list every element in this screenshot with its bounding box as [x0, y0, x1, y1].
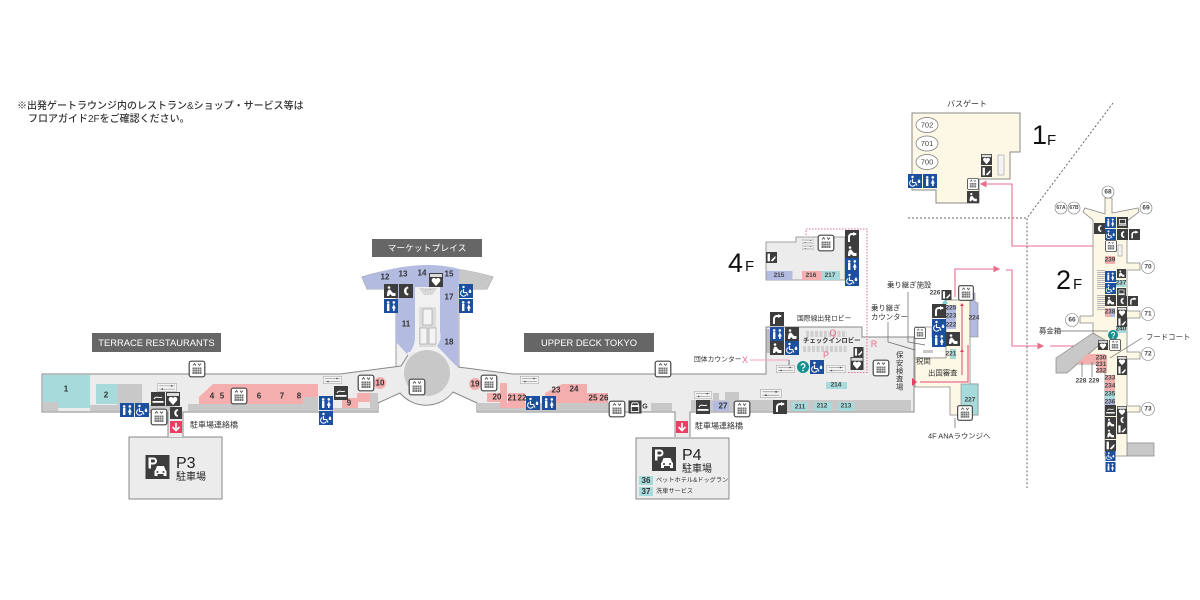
- panel: 2F concourse: 229: [1089, 378, 1100, 384]
- heading: market place: [372, 239, 482, 257]
- note: floor guide reference: フロアガイド2Fをご確認ください。: [28, 112, 190, 125]
- gate 700: 700: [921, 158, 933, 166]
- heading: terrace restaurants: TERRACE RESTAURANTS: [98, 337, 215, 348]
- panel: 4F: 215: [774, 272, 785, 279]
- panel: immigration area: 検: [896, 366, 904, 376]
- floor label: 4F: F: [745, 258, 754, 275]
- numbers: west and market shops: 12: [381, 272, 390, 282]
- panel: immigration area: 乗り継ぎ: [871, 304, 901, 312]
- floor label: 2F: 2: [1056, 265, 1071, 295]
- label: food court: フードコート: [1146, 332, 1190, 342]
- numbers: east shops: 25: [589, 394, 598, 402]
- panel: immigration area: 4F ANAラウンジへ: [928, 432, 991, 440]
- floor label: 1F: [1032, 120, 1056, 150]
- numbers: east shops: 21: [508, 394, 517, 402]
- panel: P3 parking: [129, 437, 222, 499]
- panel: 2F concourse: 230: [1096, 354, 1107, 362]
- panel: 2F concourse: 231: [1096, 361, 1107, 368]
- numbers: east shops: 214: [831, 382, 842, 388]
- floor label: 1F: 1: [1032, 120, 1047, 150]
- numbers: west and market shops: 17: [445, 292, 454, 302]
- numbers: east shops: 24: [570, 384, 579, 394]
- numbers: west and market shops: 2: [104, 390, 109, 400]
- panel: immigration area: 225: [946, 304, 957, 312]
- floor label: 4F: [728, 248, 754, 278]
- numbers: west and market shops: 11: [402, 320, 411, 328]
- P4 label: P4: [682, 447, 702, 464]
- floor label: 2F: [1056, 265, 1082, 295]
- panel: immigration area: 出国審査: [928, 368, 958, 378]
- panel: 2F concourse: 233: [1105, 374, 1116, 382]
- service 36: 36: [642, 476, 651, 485]
- note: floor guide reference: ※出発ゲートラウンジ内のレストラン&ショップ・サービス等は: [17, 99, 304, 112]
- 2F gates: 73: [1144, 406, 1152, 412]
- label: west parking bridge: 駐車場連絡橋: [190, 420, 238, 430]
- numbers: east shops: 213: [841, 402, 852, 410]
- icons: market place: [384, 273, 473, 395]
- panel: 2F concourse: [1056, 198, 1154, 472]
- label: bus gate: バスゲート: [947, 98, 987, 108]
- heading: market place: マーケットプレイス: [388, 243, 466, 253]
- panel: 2F concourse: 240: [1116, 326, 1127, 332]
- numbers: east shops: 23: [552, 386, 561, 394]
- numbers: east shops: 26: [600, 394, 609, 402]
- P3 label: P3: [176, 455, 196, 472]
- numbers: west and market shops: 18: [445, 338, 454, 346]
- panel: immigration area: 221: [946, 350, 957, 358]
- panel: immigration area: 223: [946, 312, 957, 320]
- numbers: west and market shops: 5: [220, 392, 225, 400]
- label: international departure lobby: 国際線出発ロビー: [797, 314, 852, 322]
- numbers: east shops: 212: [817, 402, 828, 410]
- panel: immigration area: 222: [946, 322, 957, 328]
- panel: main terminal floor: [42, 288, 914, 437]
- icons: check-in lobby: [770, 312, 889, 376]
- numbers: east shops: 211: [795, 404, 806, 410]
- icons: upper deck: [481, 361, 787, 433]
- panel: 4F: 216: [806, 272, 817, 279]
- numbers: east shops: 19: [471, 380, 480, 388]
- numbers: west and market shops: 10: [376, 378, 385, 388]
- panel: immigration area: カウンター: [871, 312, 908, 322]
- numbers: west and market shops: 7: [280, 392, 285, 400]
- 2F gates: [1055, 186, 1154, 416]
- numbers: west and market shops: 1: [64, 384, 69, 394]
- panel: 2F concourse: 232: [1096, 368, 1107, 374]
- label P: P: [823, 350, 829, 360]
- P3 parking label: 駐車場: [176, 470, 206, 483]
- icon: P3 parking: [146, 455, 170, 479]
- floor divider lines: [908, 103, 1113, 488]
- panel: immigration area: 場: [896, 382, 904, 392]
- numbers: west and market shops: 14: [418, 268, 427, 278]
- icons: west wing: [120, 361, 374, 433]
- panel: 2F concourse: 239: [1105, 256, 1116, 264]
- floor label: 4F: 4: [728, 248, 743, 278]
- panel: immigration area: 安: [896, 358, 903, 368]
- numbers: west and market shops: 6: [257, 392, 262, 400]
- floor label: 1F: F: [1047, 132, 1056, 149]
- panel: P4 parking: [636, 438, 729, 499]
- 2F gates: 70: [1144, 264, 1152, 270]
- escalators: [157, 288, 845, 399]
- numbers: west and market shops: 15: [445, 270, 454, 278]
- 2F gates: 72: [1144, 350, 1152, 358]
- numbers: east shops: 22: [518, 394, 527, 402]
- 2F gates: 68: [1104, 188, 1112, 196]
- service 36: [639, 476, 728, 485]
- floor label: 2F: F: [1073, 276, 1082, 293]
- label: group counter: 団体カウンター: [694, 354, 742, 364]
- label: check-in lobby: チェックインロビー: [803, 336, 861, 344]
- 2F gates: 67A: [1056, 205, 1066, 211]
- panel: 2F concourse: 238: [1105, 308, 1116, 316]
- panel: immigration area: 224: [969, 314, 980, 322]
- panel: immigration area: 乗り継ぎ施設: [887, 280, 932, 290]
- service 36: ペットホテル&ドッグラン: [656, 476, 728, 484]
- panel: 2F concourse: 237: [1116, 280, 1127, 286]
- numbers: east shops: [471, 380, 852, 410]
- icon: P4 parking: [652, 447, 676, 471]
- 2F gates: 67B: [1069, 205, 1079, 211]
- P4 parking label: 駐車場: [682, 462, 712, 475]
- arrow: routes between floors: [955, 182, 1105, 348]
- panel: immigration area: 保: [896, 350, 904, 360]
- service 37: 37: [642, 487, 651, 496]
- service 37: [639, 487, 693, 496]
- gate 701: 701: [921, 139, 933, 148]
- panel: immigration area: [871, 280, 991, 440]
- numbers: west and market shops: 8: [297, 392, 302, 400]
- label: east parking bridge: 駐車場連絡橋: [695, 420, 743, 430]
- label X: X: [742, 355, 748, 365]
- panel: immigration area: 226: [930, 290, 941, 296]
- panel: 4F: 217: [825, 272, 836, 279]
- panel: 1F bus gate: [908, 113, 1020, 203]
- panel: 2F concourse: 234: [1105, 382, 1116, 390]
- 2F gates: 71: [1144, 310, 1152, 318]
- label: donation box: 募金箱: [1039, 326, 1061, 336]
- numbers: west and market shops: [64, 268, 454, 408]
- note: floor guide reference: [17, 99, 304, 125]
- service 37: 洗車サービス: [656, 487, 693, 495]
- panel: immigration area: 査: [896, 374, 904, 384]
- numbers: west and market shops: 9: [347, 398, 352, 408]
- panel: 2F concourse: 236: [1105, 398, 1116, 406]
- heading: terrace restaurants: [92, 333, 221, 352]
- numbers: west and market shops: 13: [399, 270, 408, 278]
- heading: upper deck tokyo: [524, 333, 654, 352]
- numbers: west and market shops: 4: [210, 392, 215, 400]
- panel: immigration area: 税関: [916, 356, 931, 366]
- panel: 2F concourse: 228: [1076, 378, 1087, 384]
- numbers: east shops: 27: [719, 402, 728, 410]
- heading: upper deck tokyo: UPPER DECK TOKYO: [541, 337, 637, 348]
- panel: market place wing: [362, 265, 493, 370]
- numbers: east shops: 20: [493, 392, 502, 402]
- label R: R: [871, 339, 878, 349]
- label Q: Q: [829, 328, 837, 338]
- panel: 2F concourse: 235: [1105, 390, 1116, 398]
- panel: 4F: [766, 230, 859, 286]
- pink dotted route: [806, 229, 867, 372]
- panel: immigration area: 227: [965, 396, 976, 404]
- 2F gates: 66: [1068, 316, 1076, 324]
- gate 702: 702: [921, 120, 933, 130]
- numbers: east shops: G: [642, 404, 648, 410]
- 2F gates: 69: [1142, 204, 1150, 212]
